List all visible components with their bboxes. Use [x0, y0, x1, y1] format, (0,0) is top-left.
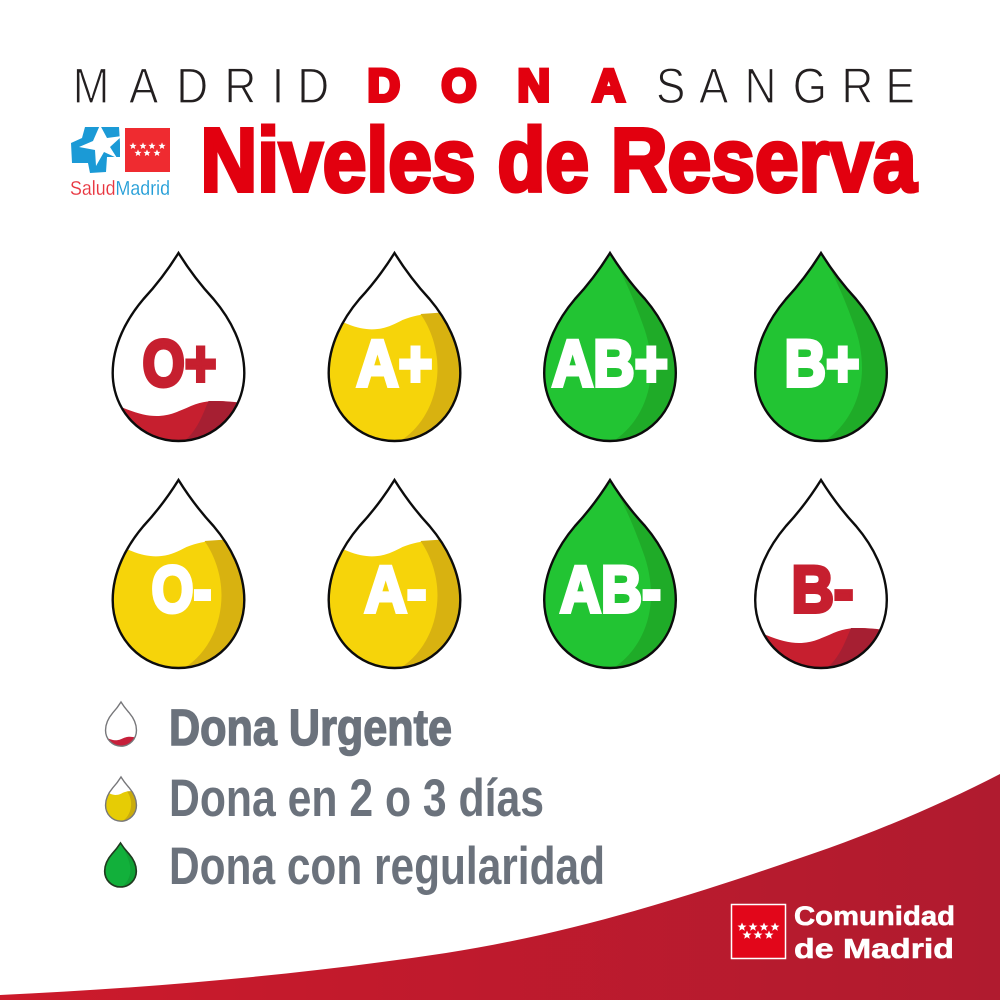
header line: Madrid Dona Sangre: DONA: [368, 60, 625, 111]
header line: Madrid Dona Sangre: [73, 57, 915, 114]
logo wordmark: SaludMadrid: [70, 178, 170, 200]
drop: B- urgent: [751, 480, 891, 670]
header line: Madrid Dona Sangre: SANGRE: [656, 57, 915, 114]
drop: AB+ good: [544, 253, 680, 443]
icon: legend yellow drop: [105, 777, 137, 822]
drop: A- medium: [324, 480, 464, 670]
drop: B- urgent: B-: [792, 552, 854, 626]
header line: Madrid Dona Sangre: MADRID: [73, 57, 329, 114]
drop: O+ urgent: O+: [142, 326, 216, 400]
legend: [105, 699, 605, 896]
drop: A+ medium: [324, 253, 464, 443]
drop: B+ good: B+: [784, 326, 860, 400]
logo: Comunidad de Madrid: [732, 901, 955, 964]
drop: O- medium: [108, 480, 248, 670]
title: Niveles de Reserva: Niveles de Reserva: [200, 111, 917, 211]
icon: red flag with stars: [125, 128, 170, 172]
drop: AB- good: AB-: [560, 552, 661, 626]
icon: flag: [732, 904, 786, 958]
logo: Comunidad de Madrid: de Madrid: [794, 933, 954, 964]
wordmark: Comunidad: [794, 901, 955, 931]
legend text: 2 or 3 days: Dona en 2 o 3 días: [169, 769, 544, 828]
drop: B+ good: [755, 253, 891, 443]
legend text: urgent: Dona Urgente: [169, 699, 452, 756]
icon: legend red drop: [105, 702, 137, 747]
logo: SaludMadrid: [70, 125, 170, 200]
icon: blue star cross: [71, 125, 122, 173]
drop: AB+ good: AB+: [552, 326, 668, 400]
drop: A- medium: A-: [364, 552, 426, 626]
drop: A+ medium: A+: [356, 326, 432, 400]
drop: O- medium: O-: [152, 552, 212, 626]
legend text: regularly: Dona con regularidad: [169, 837, 605, 896]
drop: AB- good: [544, 480, 680, 670]
icon: legend green drop: [105, 843, 137, 887]
red swoosh footer: [0, 774, 1000, 1000]
drop: O+ urgent: [108, 253, 248, 443]
